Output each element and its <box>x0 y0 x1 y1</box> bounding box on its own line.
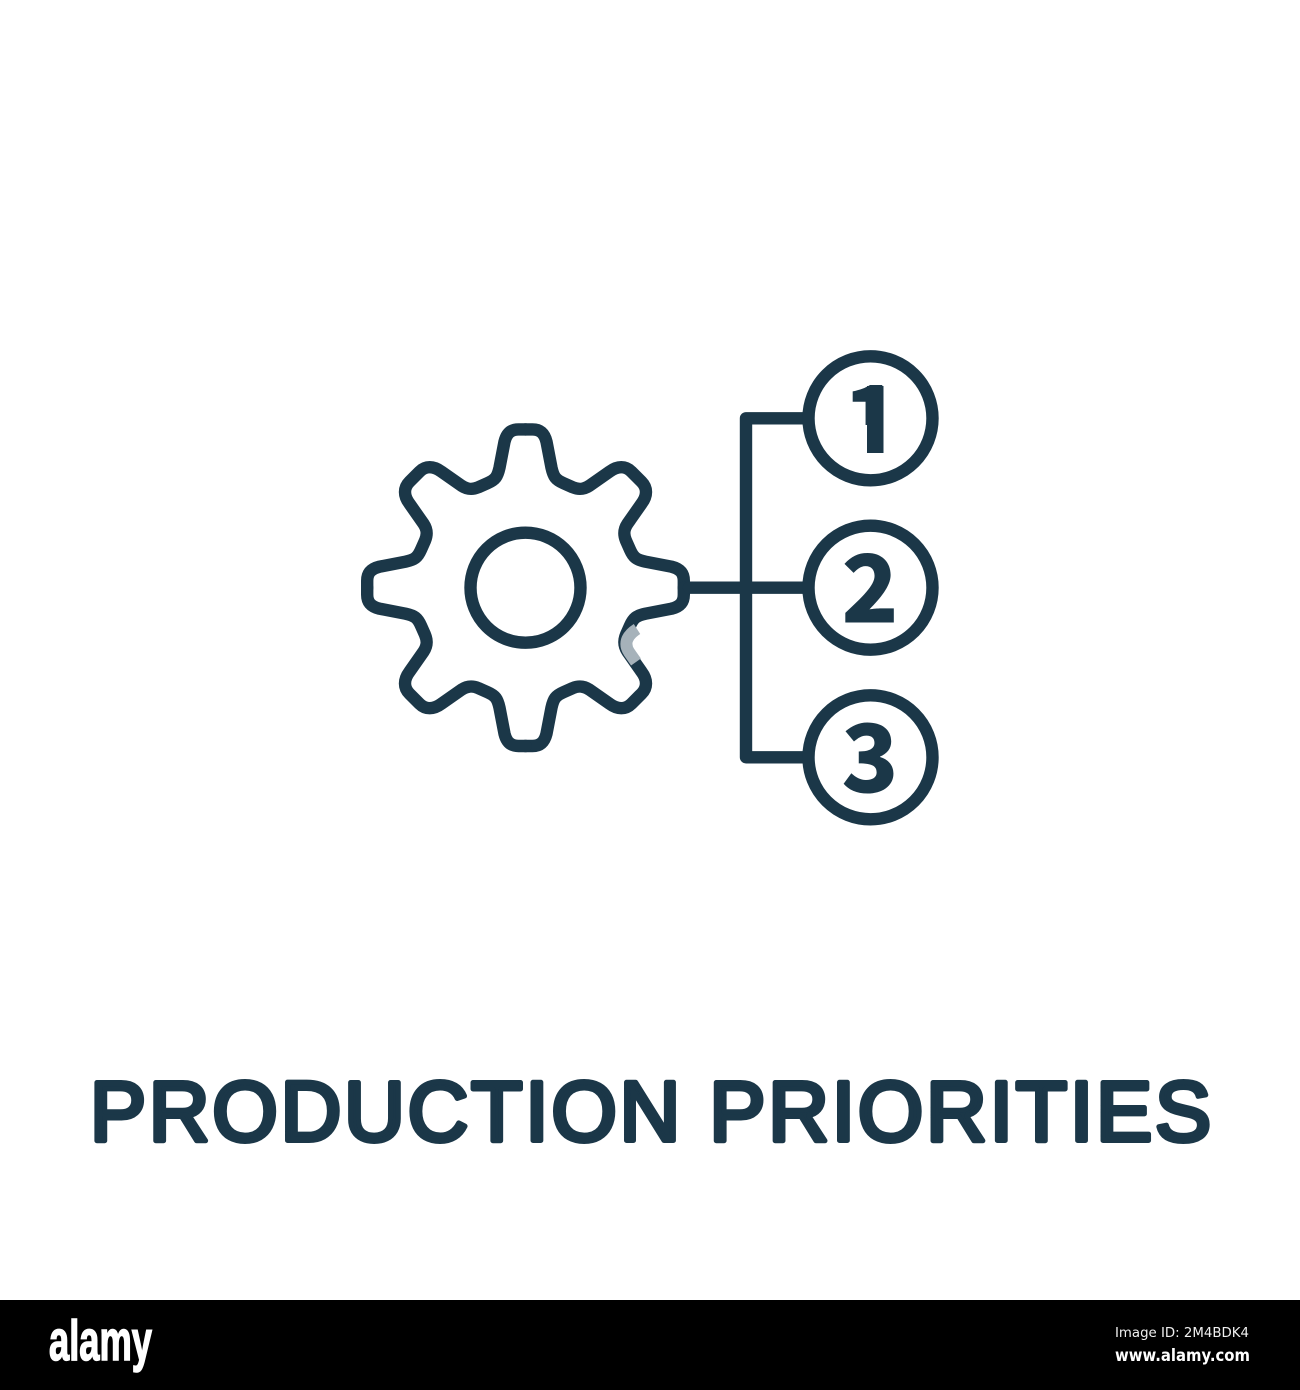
image id: Image ID: 2M4BDK4 <box>1115 1325 1249 1341</box>
number badge 2 <box>808 526 932 650</box>
digit 2: 2 <box>841 514 899 650</box>
title: PRODUCTION PRIORITIES <box>90 1064 1211 1158</box>
icon: production priorities <box>367 356 932 819</box>
watermark fragment on gear <box>626 629 637 662</box>
number badge 1 <box>808 356 932 480</box>
website: www.alamy.com <box>1115 1346 1250 1366</box>
footer bar <box>0 1300 1300 1390</box>
number badge 3 <box>808 695 932 819</box>
alamy logo: alamy <box>49 1309 152 1373</box>
digit 3: 3 <box>841 684 899 820</box>
connector tree <box>689 418 808 757</box>
digit 1: 1 <box>843 345 901 481</box>
icon: gear <box>367 429 684 746</box>
